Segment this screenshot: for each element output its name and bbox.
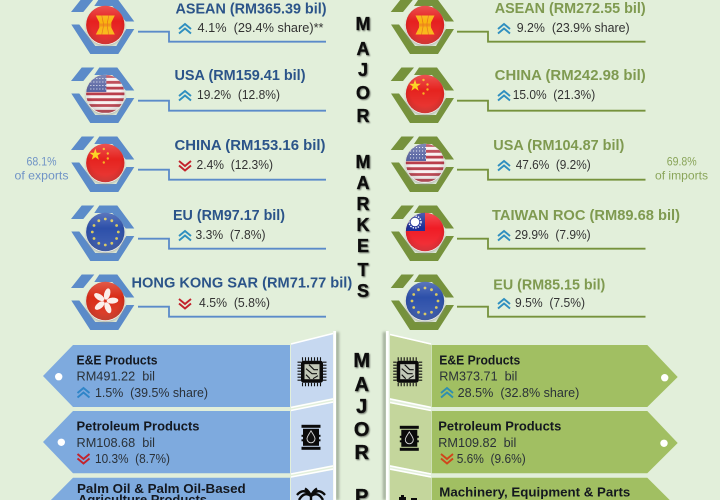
export product: E&E Products: E&E Products xyxy=(76,354,158,368)
export market: China xyxy=(71,136,326,192)
import product: Machinery, Equipment and Parts xyxy=(390,469,678,500)
import product: E&E Products: 28.5% (32.8% share) xyxy=(458,386,579,400)
export product: Petroleum Products: RM108.68 bil xyxy=(76,436,155,450)
export market: USA xyxy=(71,68,326,123)
export market: EU: EU (RM97.17 bil) xyxy=(173,208,285,224)
heading: major markets: K xyxy=(356,215,370,235)
export market: Hong Kong SAR: HONG KONG SAR (RM71.77 bil) xyxy=(132,276,352,292)
import market: USA xyxy=(391,136,646,192)
import market: Taiwan ROC xyxy=(391,206,680,261)
export market: Hong Kong SAR xyxy=(71,274,352,330)
import market: USA: USA (RM104.87 bil) xyxy=(493,138,624,154)
export product: E&E Products xyxy=(43,334,333,408)
heading: major products: O xyxy=(354,419,369,441)
import market: EU: 9.5% (7.5%) xyxy=(515,296,585,310)
callout: share of imports xyxy=(655,154,708,182)
export market: USA: USA (RM159.41 bil) xyxy=(174,68,306,84)
heading: major markets: O xyxy=(356,83,370,103)
import product: E&E Products: RM373.71 bil xyxy=(439,370,517,384)
export market: China: 2.4% (12.3%) xyxy=(196,158,273,172)
heading: major markets: R xyxy=(356,106,370,126)
export market: ASEAN: ASEAN (RM365.39 bil) xyxy=(176,2,327,18)
heading: major markets: E xyxy=(357,236,369,256)
panel: import markets xyxy=(391,0,680,330)
import product: Petroleum Products: RM109.82 bil xyxy=(438,436,516,450)
import market: China: CHINA (RM242.98 bil) xyxy=(495,68,646,84)
import market: China: 15.0% (21.3%) xyxy=(513,88,595,102)
callout: share of imports: 69.8% xyxy=(667,154,697,168)
import market: ASEAN: 9.2% (23.9% share) xyxy=(517,21,630,35)
heading: major products: M xyxy=(353,350,370,372)
import market: Taiwan ROC: 29.9% (7.9%) xyxy=(515,228,591,242)
heading: major markets: M xyxy=(356,152,370,172)
import product: Machinery, Equipment and Parts: Machinery, Equipment & Parts xyxy=(439,486,630,500)
export product: Petroleum Products: Petroleum Products xyxy=(76,420,200,434)
heading: major markets: A xyxy=(356,39,370,59)
export product: Palm Oil and Palm Oil-Based Agriculture Products: Palm Oil & Palm Oil-Based xyxy=(77,482,246,496)
export market: USA: 19.2% (12.8%) xyxy=(197,88,280,102)
panel: export markets xyxy=(71,0,352,330)
heading: major products: J xyxy=(356,396,367,418)
panel: export products xyxy=(43,331,339,500)
heading: major markets: R xyxy=(356,194,370,214)
callout: share of exports: of exports xyxy=(14,168,68,182)
heading: major products: R xyxy=(354,442,369,464)
import product: E&E Products: E&E Products xyxy=(439,354,520,368)
export market: ASEAN xyxy=(71,0,327,54)
import market: USA: 47.6% (9.2%) xyxy=(516,158,591,172)
heading: major markets: T xyxy=(358,260,368,280)
heading: major markets xyxy=(356,14,370,301)
import market: EU: EU (RM85.15 bil) xyxy=(493,277,605,293)
export product: E&E Products: RM491.22 bil xyxy=(76,370,155,384)
import market: Taiwan ROC: TAIWAN ROC (RM89.68 bil) xyxy=(492,208,680,224)
heading: major markets: S xyxy=(357,281,369,301)
import market: EU xyxy=(391,274,646,330)
heading: major markets: M xyxy=(356,14,370,34)
callout: share of imports: of imports xyxy=(655,168,708,182)
panel: import products xyxy=(383,331,678,500)
export product: Petroleum Products: 10.3% (8.7%) xyxy=(95,452,170,466)
export product: E&E Products: 1.5% (39.5% share) xyxy=(95,386,208,400)
import product: Petroleum Products: 5.6% (9.6%) xyxy=(457,452,526,466)
export market: EU: 3.3% (7.8%) xyxy=(196,228,266,242)
export market: Hong Kong SAR: 4.5% (5.8%) xyxy=(199,296,270,310)
callout: share of exports xyxy=(14,154,68,182)
callout: share of exports: 68.1% xyxy=(26,154,57,168)
import market: ASEAN xyxy=(391,0,646,54)
import market: China xyxy=(391,68,646,123)
export product: Petroleum Products xyxy=(43,402,333,474)
export market: EU xyxy=(71,206,326,261)
export product: Palm Oil and Palm Oil-Based Agriculture Products xyxy=(43,469,333,500)
export market: ASEAN: 4.1% (29.4% share)** xyxy=(198,21,324,35)
heading: major products: A xyxy=(354,374,369,396)
import product: Petroleum Products: Petroleum Products xyxy=(438,420,561,434)
import product: E&E Products xyxy=(390,334,678,408)
import market: ASEAN: ASEAN (RM272.55 bil) xyxy=(495,1,646,17)
heading: major markets: J xyxy=(358,60,368,80)
heading: major products xyxy=(353,350,370,500)
import product: Petroleum Products xyxy=(390,402,678,474)
heading: major markets: A xyxy=(356,173,370,193)
export market: China: CHINA (RM153.16 bil) xyxy=(174,138,326,154)
